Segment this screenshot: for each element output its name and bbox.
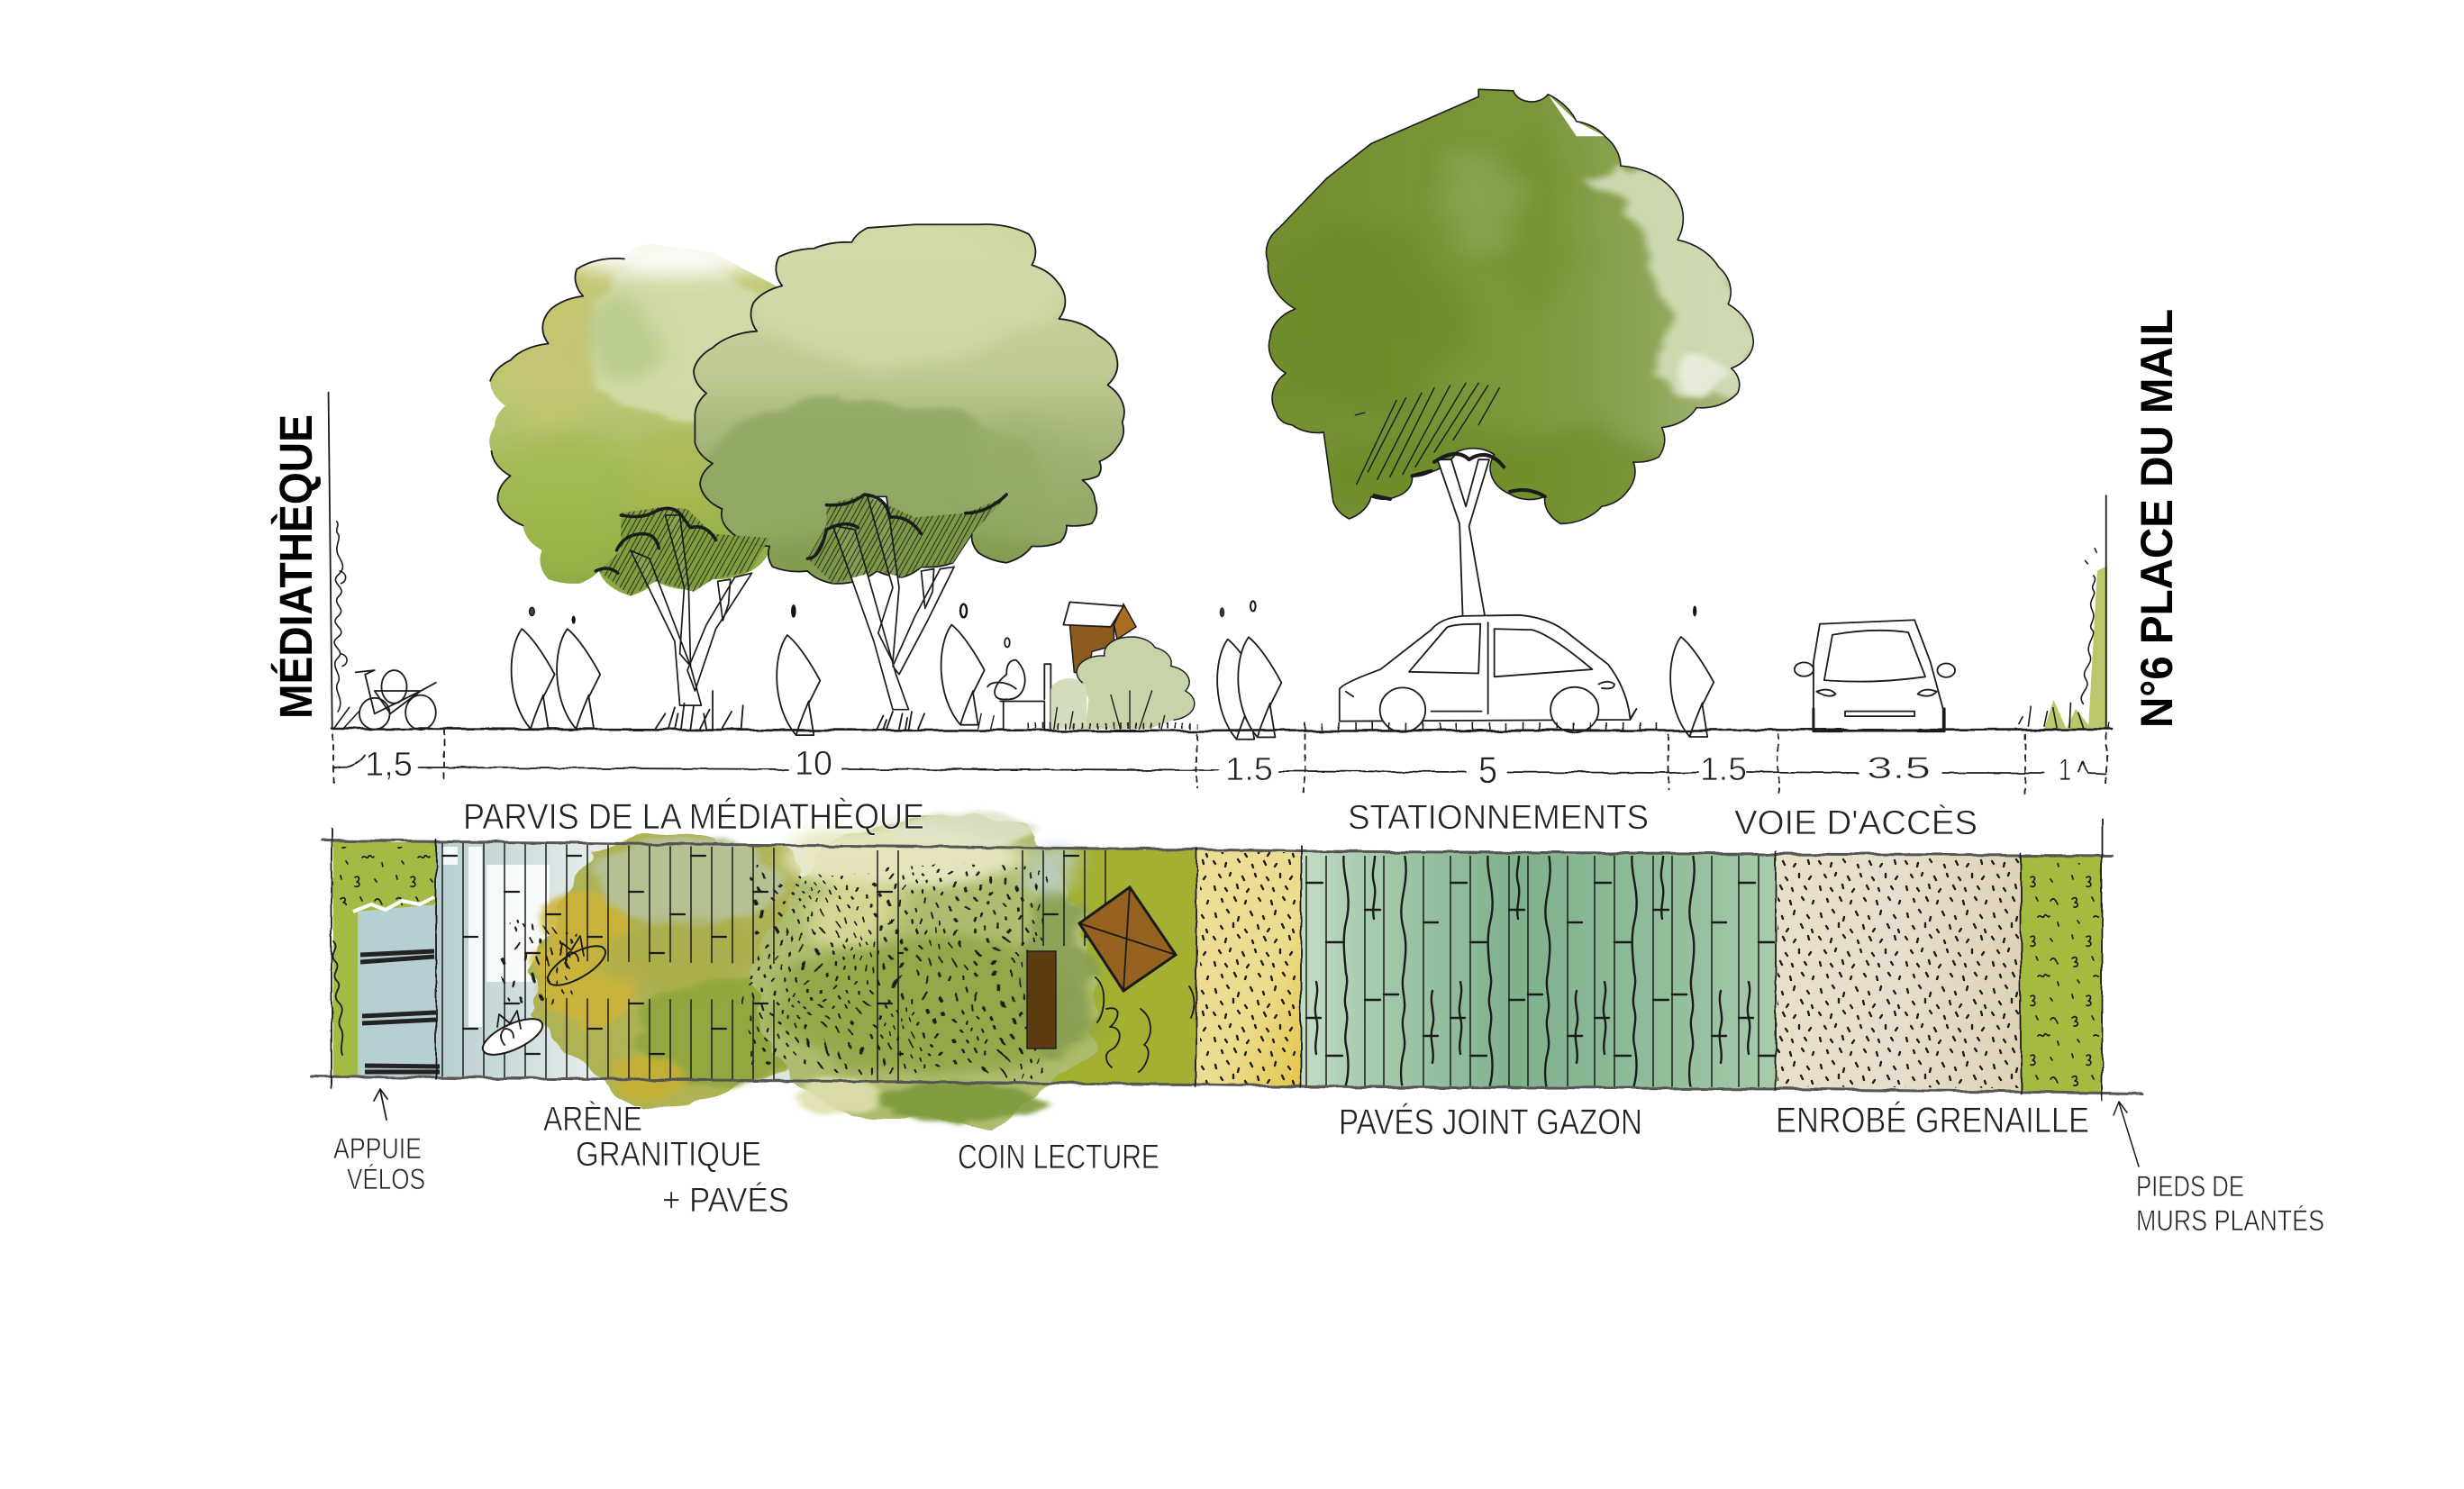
figure 1: 1: [2059, 753, 2071, 787]
figure 1,5: 1,5: [365, 746, 413, 784]
arrow to wall foot: [2114, 1102, 2139, 1167]
label: voie d'accès: VOIE D'ACCÈS: [1734, 804, 1978, 842]
arrow up: [374, 1089, 387, 1120]
planting bed left: [333, 841, 436, 1076]
green paver band: [1301, 851, 1776, 1089]
arena watercolour blob: [530, 833, 819, 1108]
reader on bench: [987, 660, 1050, 729]
book kiosk: [1063, 602, 1136, 675]
ground line: [332, 726, 2113, 731]
seating hat yellow: [542, 936, 611, 993]
seating hat white: [477, 1011, 548, 1062]
trunks and canopy shading of left trees: [596, 495, 1006, 731]
label: coin lecture: COIN LECTURE: [958, 1139, 1159, 1176]
label: enrobé grenaille: ENROBÉ GRENAILLE: [1776, 1100, 2089, 1140]
yellow stabilised band: [1196, 850, 1301, 1086]
book kiosk roof plan: [1079, 887, 1176, 991]
car front view: [1795, 620, 1955, 731]
parked car side view: [1340, 615, 1636, 732]
hatching on right tree: [1355, 383, 1499, 485]
plan strip: [311, 813, 2142, 1130]
figure 1.5: 1.5: [1225, 750, 1273, 787]
reading bench: [1027, 951, 1056, 1049]
tree: right watercolour: [1266, 89, 1757, 616]
grass tufts at tree feet: [656, 691, 924, 731]
white gaps in paving: [441, 847, 550, 1027]
bike parking plate: [358, 904, 436, 1078]
label group: appuie vélos: [333, 1089, 425, 1195]
planted corner olive: [1045, 849, 1196, 1085]
paved parvis base: [436, 842, 1196, 1085]
trunk of right tree: [1438, 459, 1489, 616]
bike racks: [360, 951, 440, 1072]
tree: front left watercolour: [694, 220, 1124, 584]
label: arène granitique + pavés: [543, 1100, 789, 1220]
beige gravel band: [1776, 854, 2021, 1092]
people silhouettes: [512, 601, 1714, 740]
label: pavés joint gazon: PAVÉS JOINT GAZON: [1339, 1102, 1642, 1142]
paving and stipple ink: [436, 842, 1110, 1081]
label group: pieds de murs plantés: MURS PLANTÉS: [2136, 1204, 2324, 1237]
label group: appuie vélos: APPUIE: [333, 1132, 422, 1165]
bicycles: [356, 670, 436, 730]
heading: Médiathèque: MÉDIATHÈQUE: [270, 414, 322, 719]
right wall with climbing plant: [2019, 495, 2107, 729]
label: arène granitique + pavés: ARÈNE: [543, 1100, 642, 1139]
garden scribbles: [332, 847, 1195, 1072]
heading: N°6 Place du Mail: N°6 PLACE DU MAIL: [2132, 309, 2182, 728]
label: arène granitique + pavés: + PAVÉS: [662, 1181, 789, 1220]
strip outlines: [311, 820, 2142, 1101]
label group: appuie vélos: VÉLOS: [347, 1163, 425, 1195]
dimension line with figures: [333, 730, 2106, 793]
shrubs: [978, 637, 1195, 729]
left wall with climbing plant: [329, 393, 359, 729]
figure 10: 10: [795, 745, 832, 783]
figure 5: 5: [1478, 749, 1497, 791]
label: stationnements: STATIONNEMENTS: [1348, 799, 1649, 837]
label group: pieds de murs plantés: PIEDS DE: [2136, 1170, 2244, 1203]
figure 3.5: 3.5: [1867, 751, 1931, 785]
label: parvis: PARVIS DE LA MÉDIATHÈQUE: [463, 796, 924, 837]
label: arène granitique + pavés: GRANITIQUE: [576, 1136, 761, 1174]
figure 1.5: 1.5: [1700, 750, 1747, 787]
right planting band: [2021, 855, 2102, 1093]
tree: back left watercolour: [489, 244, 777, 596]
label group: pieds de murs plantés: [2114, 1102, 2324, 1237]
reading corner watercolour blob: [753, 813, 1096, 1130]
section: street elevation: [329, 89, 2113, 793]
